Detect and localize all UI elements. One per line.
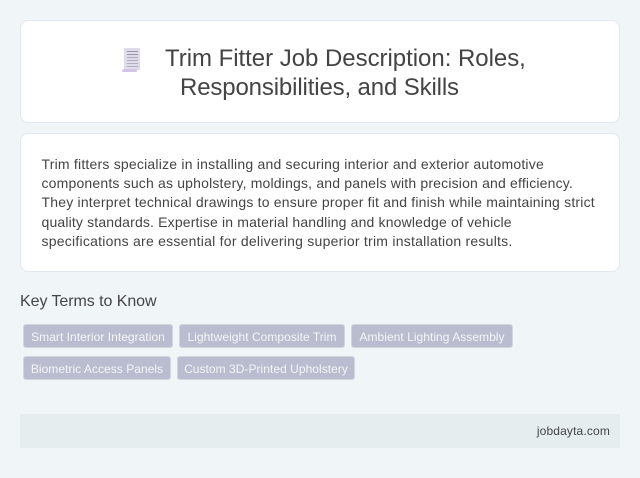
tag [23, 324, 173, 348]
description text [42, 156, 595, 249]
icon: document scroll [122, 48, 140, 72]
panel: title card [20, 20, 620, 123]
tag: Smart Interior Integration [31, 330, 165, 344]
tag [179, 324, 345, 348]
panel: description card [20, 133, 620, 272]
description text: They interpret technical drawings to ensure proper fit and finish while maintaining strict [42, 194, 595, 210]
heading: key terms: Key Terms to Know [20, 293, 157, 310]
tag: Custom 3D-Printed Upholstery [184, 362, 348, 376]
title: Trim Fitter Job Description: Roles, [165, 45, 526, 72]
description text: quality standards. Expertise in material handling and knowledge of vehicle [42, 214, 512, 230]
description text: components such as upholstery, moldings, and panels with precision and efficiency. [42, 175, 573, 191]
title: Responsibilities, and Skills [180, 74, 459, 101]
tag [177, 356, 355, 380]
tag: Ambient Lighting Assembly [359, 330, 505, 344]
tag [351, 324, 513, 348]
title [165, 45, 526, 101]
description text: Trim fitters specialize in installing and securing interior and exterior automotive [42, 156, 544, 172]
footer bar [20, 414, 620, 448]
tag list [23, 324, 513, 380]
tag: Biometric Access Panels [31, 362, 163, 376]
tag: Lightweight Composite Trim [187, 330, 337, 344]
tag [23, 356, 171, 380]
description text: specifications are essential for delivering superior trim installation results. [42, 233, 513, 249]
footer source: jobdayta.com [537, 424, 610, 438]
